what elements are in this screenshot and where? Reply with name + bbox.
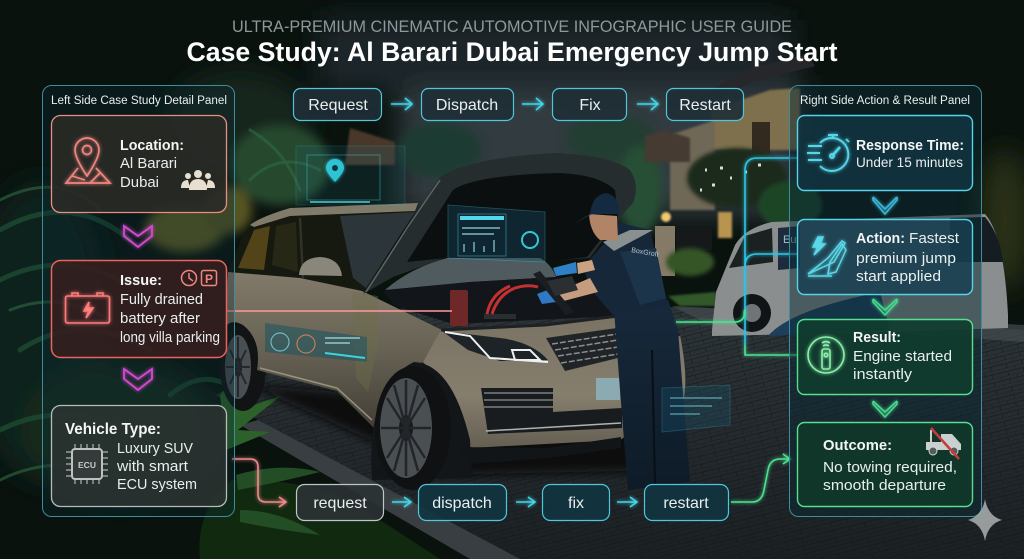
bottom process flow: request [313,495,367,512]
top process flow: Dispatch [436,97,498,114]
chevron [124,369,152,390]
van [712,214,1008,336]
right panel [790,86,982,516]
card: vehicle type: with smart [116,459,188,475]
card: vehicle type: Vehicle Type: [65,421,161,438]
left panel [42,86,234,516]
card: response time [798,116,972,190]
title block: ULTRA-PREMIUM CINEMATIC AUTOMOTIVE INFOGRAPHIC USER GUIDE [232,18,792,36]
hologram: engine diagnostics [448,205,545,262]
card: issue: long villa parking [120,330,220,346]
torso [584,223,668,315]
hologram: right data [662,385,730,432]
icon: battery [66,293,110,323]
villa (background) [345,54,822,306]
card: issue: Fully drained [120,292,203,308]
card: outcome [798,422,972,506]
engine bay [383,277,620,324]
hologram: map pin [296,146,405,205]
jump cables and battery [450,286,538,326]
card: vehicle type: Luxury SUV [117,441,193,457]
card: location [52,116,226,212]
lower intake [481,388,622,434]
card: outcome: smooth departure [823,478,946,494]
green connector: result [676,310,797,355]
card: result [798,320,972,394]
icon: jumper clamp [808,237,846,276]
card: location: Al Barari [120,156,177,172]
card: location: Dubai [120,175,159,191]
foreground plants [199,362,440,559]
icon: ECU chip: ECU [78,460,96,470]
card: location: Location: [120,137,184,154]
foliage fronds [0,130,320,480]
card: result: Engine started [853,349,952,365]
driveway [215,300,1024,559]
card: action [798,220,972,294]
chevron [873,197,897,214]
card: issue [52,260,226,358]
SUV with raised bonnet [220,153,685,490]
title block: Case Study: Al Barari Dubai Emergency Jump Start [186,37,838,67]
chevron [873,401,897,417]
bottom process flow: dispatch [432,495,492,512]
icon: stopwatch [807,135,849,171]
cowl [385,258,556,290]
icon: clock and parking [182,270,216,286]
icon: map pin [66,138,110,183]
headlight [442,331,548,361]
card: vehicle type [52,406,226,506]
card: action: Fastest [909,231,959,247]
panel caption: Right Side Action & Result Panel [800,95,970,107]
sparkle mark [968,499,1002,541]
icon: no tow truck [926,428,961,459]
roof [250,203,418,227]
title block [186,18,838,67]
front arch [371,362,472,480]
top process flow [294,88,744,120]
mirror [299,257,342,276]
top process flow: Fix [579,97,601,114]
front skirt [457,437,621,464]
forearms [577,260,595,274]
grille [546,328,618,371]
top process flow: Request [308,97,368,114]
chevron [124,226,152,247]
windscreen [340,212,415,288]
card: action: Action: [856,230,905,247]
bottom process flow: fix [568,495,584,512]
card: issue: Issue: [120,272,162,289]
greenhouse [228,205,417,292]
icon: people [181,170,215,190]
body side [225,272,442,428]
card: action: start applied [856,269,941,285]
technician: BoxGroft [631,247,659,259]
technician [533,193,690,490]
legs [614,300,690,490]
tablet [533,271,574,315]
plate [596,378,620,400]
card: response time: Under 15 minutes [856,154,963,170]
bottom process flow: restart [663,495,709,512]
chevron [873,299,897,315]
cyan connector: cards to driveway [745,158,797,345]
bonnet [363,153,636,294]
card: result: Result: [853,329,901,346]
van: Eu [783,234,796,246]
card: issue: battery after [120,311,200,327]
kerb [240,420,520,559]
hologram: door gauges [265,323,367,362]
card: outcome: Outcome: [823,437,892,454]
card: result: instantly [853,367,913,383]
icon: key fob [808,337,844,373]
red connector: issue to battery [227,308,452,314]
card: vehicle type: ECU system [117,477,197,493]
front body [423,316,685,448]
head [589,214,618,240]
panel caption: Left Side Case Study Detail Panel [51,95,227,107]
bottom process flow [296,484,728,520]
card: outcome: No towing required, [823,460,957,476]
front wheel [375,366,451,490]
pink connector: vehicle type to request [232,459,286,507]
card: action: premium jump [856,251,956,267]
card: response time: Response Time: [856,137,964,154]
icon: ECU chip [66,444,108,484]
icon: clock and parking: P [205,272,213,286]
green connector: restart to outcome [731,454,790,502]
rear wheel [220,323,266,411]
top process flow: Restart [679,97,731,114]
